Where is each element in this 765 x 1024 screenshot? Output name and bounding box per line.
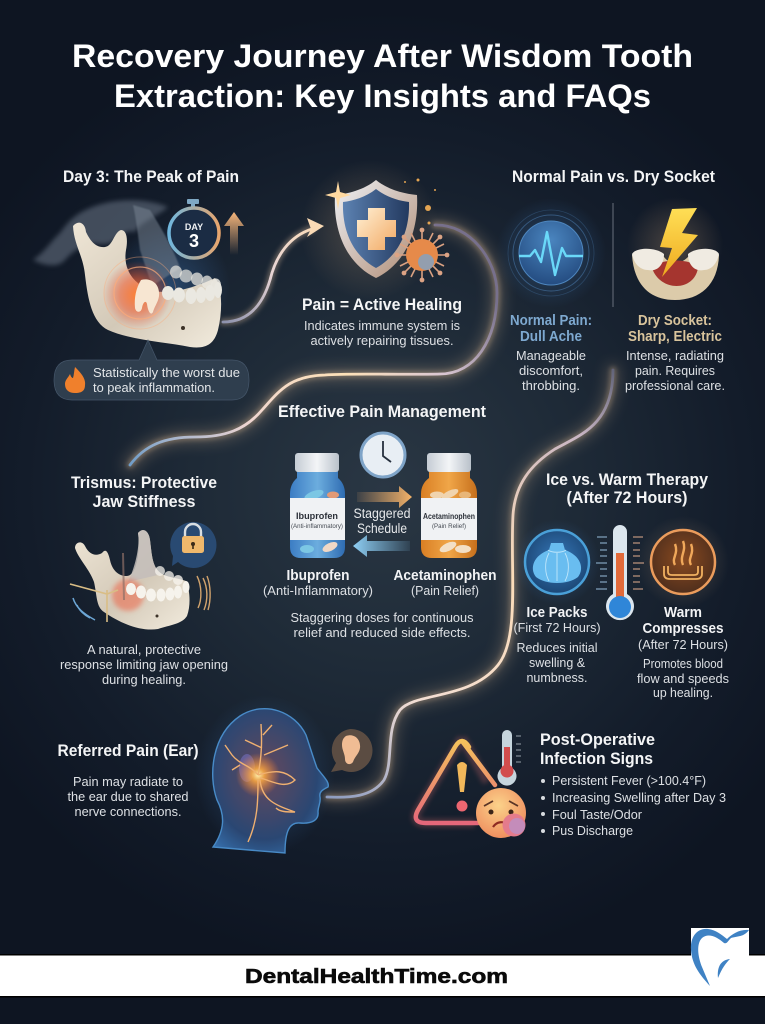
label: acetaminophen: (Pain Relief) (411, 583, 479, 598)
icon: ear bubble (331, 729, 373, 772)
icon: lightning over socket (627, 197, 723, 300)
text: ice packs: (First 72 Hours) (514, 620, 600, 635)
icon: acetaminophen bottle: (Pain Relief) (432, 524, 466, 530)
callout: worst day: to peak inflammation. (93, 380, 215, 395)
description: trismus: response limiting jaw opening (60, 657, 228, 672)
text: ice packs: Reduces initial (516, 640, 598, 655)
connector path: ear to dry socket (327, 370, 613, 797)
divider (612, 203, 614, 307)
description: referred pain (68, 774, 188, 819)
text: ice packs: numbness. (526, 670, 588, 685)
heading: trismus (71, 474, 217, 511)
icon: warning triangle (416, 738, 495, 823)
label: staggered schedule: Schedule (357, 521, 407, 536)
panel: trismus (60, 474, 228, 687)
icon: clock (361, 433, 405, 477)
text: ice packs: Ice Packs (526, 604, 588, 621)
description: staggering doses (290, 610, 474, 640)
icon: stiff jaw (70, 530, 210, 630)
text: normal pain: discomfort, (519, 363, 583, 378)
icon: thermometer (596, 525, 644, 620)
icon: swollen face (476, 788, 526, 838)
heading: comparison: Normal Pain vs. Dry Socket (512, 168, 715, 186)
footer band (0, 954, 765, 998)
icon: warm compress (637, 516, 729, 608)
icon: stopwatch day 3 (169, 199, 219, 258)
panel: pain equals active healing (300, 160, 462, 348)
heading: therapy: Ice vs. Warm Therapy (546, 471, 709, 489)
panel: normal pain vs dry socket (496, 168, 725, 393)
icon: ice pack (514, 519, 600, 605)
text: warm compresses: up healing. (653, 685, 713, 700)
label: ibuprofen: Ibuprofen (286, 567, 350, 584)
icon: ibuprofen bottle (290, 453, 345, 558)
icon: stopwatch day 3: 3 (189, 231, 199, 251)
panel: infection signs (416, 730, 726, 838)
text: dry socket: pain. Requires (635, 363, 715, 378)
callout: worst day (54, 340, 249, 400)
heading: infection signs (540, 731, 655, 768)
text: dry socket: professional care. (625, 378, 725, 393)
description: trismus (60, 642, 228, 687)
icon: jaw with wisdom tooth (33, 200, 230, 347)
heading: therapy: (After 72 Hours) (566, 489, 688, 507)
icon: pulse circle (496, 198, 606, 308)
text: warm compresses: Compresses (642, 620, 724, 637)
description: trismus: A natural, protective (87, 642, 201, 657)
text: normal pain: Normal Pain: (510, 312, 592, 329)
icon: lock bubble (170, 522, 216, 568)
text: dry socket (625, 312, 725, 393)
description: active healing: actively repairing tissues. (310, 333, 454, 348)
arrow: jaw to healing (223, 218, 324, 322)
icon: acetaminophen bottle (421, 453, 477, 558)
icon: acetaminophen bottle: Acetaminophen (423, 511, 475, 521)
heading: infection signs: Post-Operative (540, 731, 655, 749)
list: infection signs (541, 773, 726, 838)
description: active healing: Indicates immune system is (304, 318, 460, 333)
text: warm compresses: flow and speeds (637, 671, 729, 686)
title: Extraction: Key Insights and FAQs (114, 78, 651, 114)
heading: therapy (546, 471, 709, 507)
icon: stopwatch day 3: DAY (185, 222, 203, 232)
description: staggering doses: relief and reduced side effects. (294, 625, 470, 640)
text: warm compresses: Promotes blood (643, 656, 723, 671)
title (72, 38, 693, 114)
text: warm compresses: Warm (664, 604, 702, 621)
heading: active healing: Pain = Active Healing (302, 296, 462, 314)
label: acetaminophen (394, 567, 496, 598)
text: normal pain: Dull Ache (520, 328, 582, 345)
icon: rising arrow (224, 212, 244, 255)
connector path: healing to trismus (130, 225, 497, 465)
list: infection signs: Increasing Swelling after Day 3 (552, 790, 726, 805)
arrow: orange right (357, 486, 412, 508)
icon: flame (65, 367, 85, 393)
heading: day 3: Day 3: The Peak of Pain (63, 168, 239, 186)
text: normal pain: throbbing. (522, 378, 580, 393)
icon: ibuprofen bottle: (Anti-inflammatory) (291, 524, 343, 530)
list: infection signs: Persistent Fever (>100.4°F) (552, 773, 706, 788)
footer website: DentalHealthTime.com (245, 966, 508, 988)
label: ibuprofen (263, 567, 373, 598)
label: acetaminophen: Acetaminophen (394, 567, 496, 584)
heading: referred pain: Referred Pain (Ear) (58, 742, 198, 760)
arrow: blue left (353, 535, 410, 557)
logo: tooth (691, 928, 749, 986)
icon: shield with cross and virus (300, 160, 449, 300)
text: normal pain (510, 312, 592, 393)
icon: ibuprofen bottle: Ibuprofen (296, 511, 338, 522)
panel: Day 3 peak of pain (33, 168, 249, 400)
text: warm compresses (637, 604, 729, 700)
description: active healing (304, 318, 460, 348)
label: ibuprofen: (Anti-Inflammatory) (263, 583, 373, 598)
panel: ice vs warm therapy (514, 471, 729, 700)
text: warm compresses: (After 72 Hours) (638, 637, 728, 652)
description: trismus: during healing. (102, 672, 186, 687)
list: infection signs: Pus Discharge (552, 823, 633, 838)
panel: referred pain (58, 695, 373, 855)
text: normal pain: Manageable (516, 348, 586, 363)
heading: infection signs: Infection Signs (540, 750, 653, 768)
title: Recovery Journey After Wisdom Tooth (72, 38, 693, 74)
heading: trismus: Trismus: Protective (71, 474, 217, 492)
text: dry socket: Sharp, Electric (628, 328, 722, 345)
icon: small thermometer (498, 730, 521, 786)
text: dry socket: Dry Socket: (638, 312, 712, 329)
panel: effective pain management (263, 403, 496, 640)
description: referred pain: the ear due to shared (68, 789, 188, 804)
description: referred pain: nerve connections. (74, 804, 182, 819)
label: staggered schedule (354, 506, 410, 536)
description: referred pain: Pain may radiate to (73, 774, 183, 789)
description: staggering doses: Staggering doses for continuous (290, 610, 474, 625)
text: dry socket: Intense, radiating (626, 348, 724, 363)
list: infection signs: Foul Taste/Odor (552, 807, 643, 822)
heading: pain management: Effective Pain Management (278, 403, 486, 421)
heading: trismus: Jaw Stiffness (92, 493, 196, 511)
callout: worst day: Statistically the worst due (93, 365, 240, 380)
icon: head with nerves (195, 695, 335, 855)
text: ice packs: swelling & (529, 655, 585, 670)
text: ice packs (514, 604, 600, 685)
label: staggered schedule: Staggered (354, 506, 410, 521)
